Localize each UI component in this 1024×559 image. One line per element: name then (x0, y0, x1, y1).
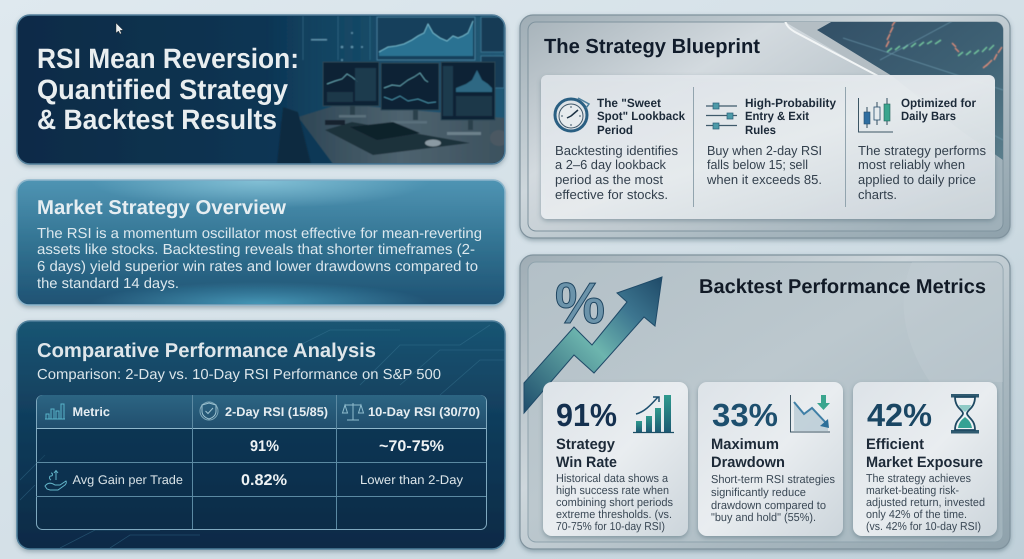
panel: market strategy overview (17, 180, 505, 305)
text: 33 percent: 33% (712, 397, 778, 433)
heading: title (37, 43, 299, 135)
icon: candlestick chart (858, 98, 893, 132)
text: overview body: the standard 14 days. (37, 276, 179, 292)
text: drawdown body: drawdown compared to (711, 500, 826, 512)
text: avg gain 2-day: 0.82% (241, 472, 287, 489)
panel: comparative performance analysis (17, 321, 505, 549)
panel: title banner (17, 15, 508, 164)
text: daily bars heading (901, 96, 976, 123)
text: drawdown label: Drawdown (711, 454, 785, 471)
text: lookback heading (597, 96, 685, 137)
text: lookback body (555, 143, 679, 202)
text: lookback heading: Spot" Lookback (597, 109, 685, 123)
text: overview body: 6 days) yield superior win rates and lower drawdowns compared to (37, 259, 478, 275)
text: win rate 10-day: ~70-75% (379, 438, 444, 455)
icon: rising bars (633, 395, 674, 432)
card: win rate (543, 382, 688, 536)
illustration: tablet with candlestick chart (785, 17, 1003, 160)
text: lookback heading: Period (597, 123, 633, 137)
illustration: trading desk with monitors (265, 16, 508, 164)
text: drawdown body: Short-term RSI strategies (711, 474, 835, 486)
text: exposure body: only 42% of the time. (866, 509, 967, 521)
text: overview body (37, 226, 482, 292)
icon: shield check (200, 402, 218, 420)
text: exposure body: (vs. 42% for 10-day RSI) (866, 521, 981, 533)
text: metric header: Metric (72, 405, 110, 419)
text: 2-day header: 2-Day RSI (15/85) (225, 405, 328, 419)
panel: strategy blueprint (520, 15, 1010, 238)
heading: strategy blueprint: The Strategy Blueprint (544, 35, 760, 58)
table: RSI comparison (36, 395, 486, 530)
icon: sliders (706, 103, 737, 129)
text: win rate body: Historical data shows a (556, 473, 669, 485)
text: daily bars body: charts. (858, 187, 897, 202)
text: lookback body: effective for stocks. (555, 187, 668, 202)
text: entry exit heading (745, 96, 836, 137)
text: daily bars heading: Optimized for (901, 96, 976, 110)
text: win rate label (556, 436, 617, 471)
text: 10-day header: 10-Day RSI (30/70) (368, 405, 480, 419)
text: win rate body (556, 473, 673, 533)
icon: hand with money (45, 470, 66, 490)
text: win rate label: Strategy (556, 436, 616, 453)
text: exposure body: adjusted return, invested (866, 497, 985, 509)
text: entry exit body: falls below 15; sell (707, 157, 808, 172)
text: exposure label: Efficient (866, 436, 924, 453)
icon: bar chart (45, 404, 65, 419)
text: daily bars heading: Daily Bars (901, 109, 956, 123)
card: three strategy points (541, 75, 995, 219)
text: win rate body: high success rate when (556, 485, 669, 497)
text: drawdown body (711, 474, 835, 524)
text: daily bars body (858, 143, 987, 202)
text: daily bars body: applied to daily price (858, 172, 976, 187)
text: drawdown body: significantly reduce (711, 487, 806, 499)
text: win rate body: 70-75% for 10-day RSI) (556, 521, 665, 533)
text: entry exit heading: Rules (745, 123, 776, 137)
heading: comparative analysis: Comparative Performance Analysis (37, 340, 376, 362)
heading: title: & Backtest Results (37, 104, 277, 135)
text: entry exit body: when it exceeds 85. (706, 172, 822, 187)
text: entry exit heading: Entry & Exit (745, 109, 809, 123)
text: win rate body: combining short periods (556, 497, 673, 509)
text: exposure body: market-beating risk- (866, 485, 959, 497)
text: overview body: The RSI is a momentum oscillator most effective for mean-reverting (37, 226, 482, 242)
icon: stopwatch (555, 98, 589, 131)
icon: hourglass (951, 394, 979, 434)
text: exposure label (866, 436, 983, 471)
icon: balance scale (342, 403, 364, 420)
text: avg gain label: Avg Gain per Trade (72, 473, 183, 487)
text: lookback body: a 2–6 day lookback (555, 157, 666, 172)
text: comparison subtitle: Comparison: 2-Day vs. 10-Day RSI Performance on S&P 500 (37, 367, 441, 383)
text: drawdown label: Maximum (711, 436, 779, 453)
text: daily bars body: most reliably when (858, 157, 965, 172)
text: exposure label: Market Exposure (866, 454, 983, 471)
text: win rate 2-day: 91% (250, 438, 279, 455)
text: lookback body: Backtesting identifies (555, 143, 679, 158)
heading: title: RSI Mean Reversion: (37, 43, 299, 74)
heading: title: Quantified Strategy (37, 74, 288, 105)
text: exposure body (866, 473, 985, 533)
text: drawdown body: "buy and hold" (55%). (711, 512, 816, 524)
text: lookback heading: The "Sweet (597, 96, 661, 110)
text: entry exit body (706, 143, 822, 187)
icon: mouse cursor (116, 23, 123, 34)
text: 91 percent: 91% (556, 397, 617, 433)
heading: backtest metrics: Backtest Performance Metrics (699, 276, 986, 298)
text: win rate label: Win Rate (556, 454, 617, 471)
text: drawdown label (711, 436, 785, 471)
icon: rising arrow with percent: % (555, 271, 605, 336)
text: win rate body: extreme thresholds. (vs. (556, 509, 672, 521)
card: market exposure (853, 382, 997, 536)
text: entry exit body: Buy when 2-day RSI (707, 143, 822, 158)
text: exposure body: The strategy achieves (866, 473, 971, 485)
text: daily bars body: The strategy performs (858, 143, 987, 158)
text: avg gain 10-day: Lower than 2-Day (360, 473, 464, 487)
text: overview body: assets like stocks. Backtesting reveals that shorter timeframes (2- (37, 242, 475, 258)
card: maximum drawdown (698, 382, 843, 536)
panel: backtest performance metrics (520, 255, 1010, 549)
text: entry exit heading: High-Probability (745, 96, 836, 110)
icon: falling chart (790, 395, 830, 432)
text: 42 percent: 42% (867, 397, 932, 433)
heading: overview: Market Strategy Overview (37, 197, 286, 219)
icon: rising arrow with percent (524, 271, 662, 413)
text: lookback body: period as the most (555, 172, 663, 187)
